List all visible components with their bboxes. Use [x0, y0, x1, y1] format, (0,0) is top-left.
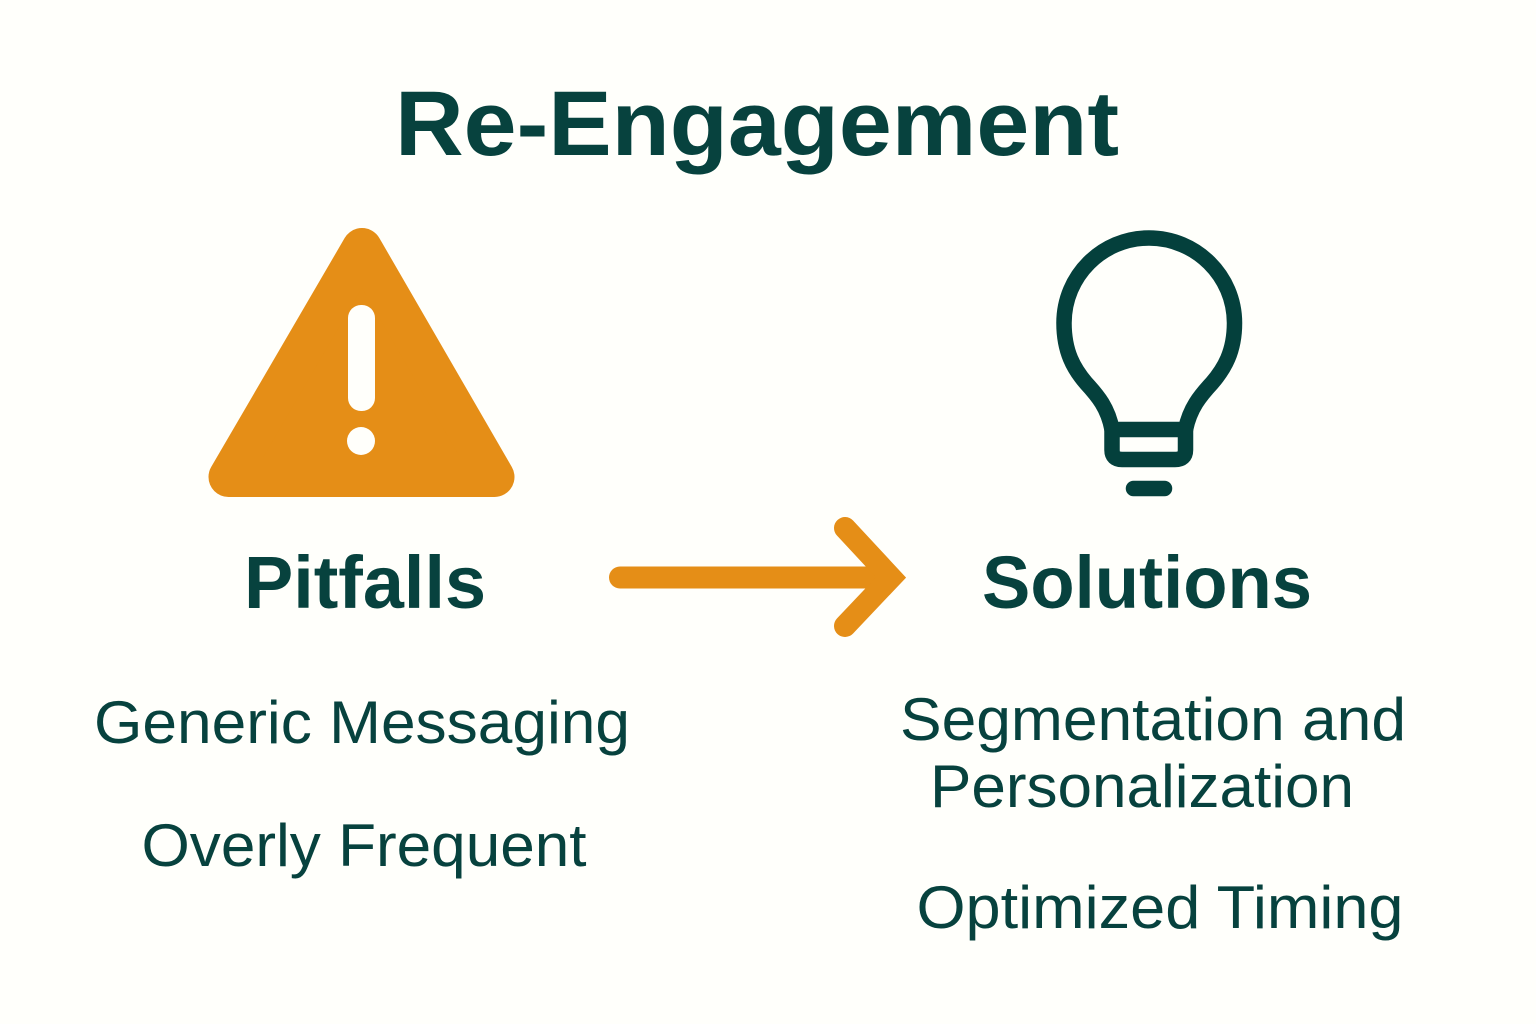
text: segmentation and personalization: Segmentation and — [900, 686, 1406, 753]
heading: pitfalls: Pitfalls — [244, 541, 486, 624]
text: segmentation and personalization: Personalization — [930, 753, 1354, 820]
panel: pitfalls — [94, 248, 630, 879]
text: overly frequent: Overly Frequent — [142, 812, 587, 879]
title: Re-Engagement — [395, 73, 1119, 175]
icon: light bulb — [1064, 238, 1234, 488]
arrow — [620, 528, 891, 626]
icon: warning triangle — [228, 248, 494, 477]
heading: solutions: Solutions — [982, 541, 1312, 624]
text: segmentation and personalization — [900, 686, 1406, 820]
text: generic messaging: Generic Messaging — [94, 689, 630, 756]
panel: solutions — [900, 238, 1406, 941]
text: optimized timing: Optimized Timing — [916, 874, 1404, 941]
